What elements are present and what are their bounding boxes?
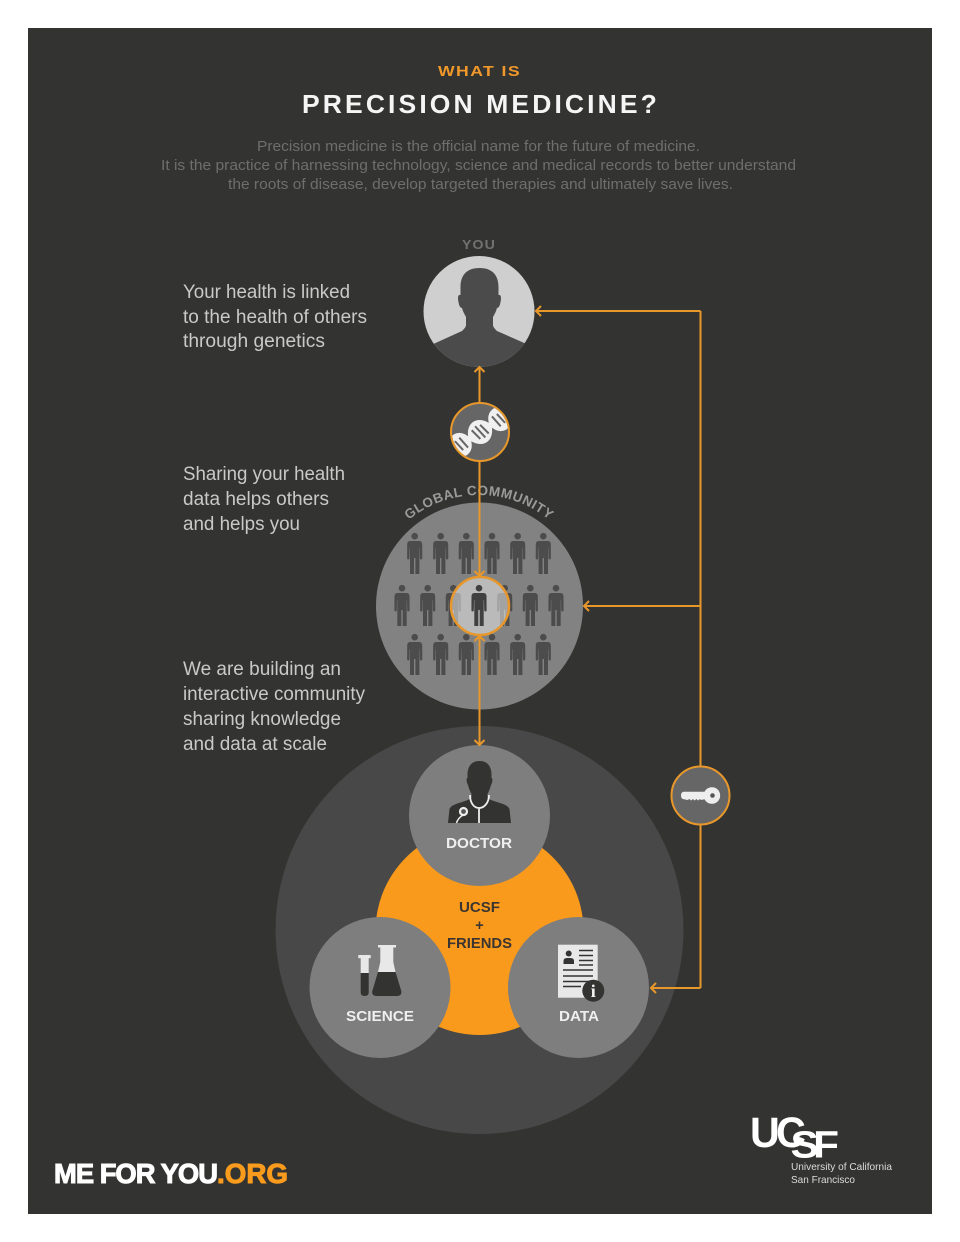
node: data [508, 917, 649, 1058]
intro paragraph: It is the practice of harnessing technology, science and medical records to better understand [161, 157, 796, 174]
node: doctor: DOCTOR [446, 836, 513, 852]
logo: ucsf: SF [790, 1124, 838, 1166]
logo: ucsf: UC [750, 1109, 805, 1157]
connector lines [474, 306, 700, 993]
centre label: + [475, 918, 484, 934]
large ecosystem circle [276, 726, 684, 1134]
node: science: SCIENCE [346, 1009, 414, 1025]
text: sharing data: data helps others [183, 489, 329, 510]
node: data: DATA [559, 1009, 600, 1025]
eyebrow heading: WHAT IS [438, 63, 521, 80]
intro paragraph: the roots of disease, develop targeted therapies and ultimately save lives. [228, 176, 733, 193]
icon: doctor [448, 761, 511, 823]
text: interactive community: We are building an [183, 659, 341, 680]
node: doctor [409, 745, 550, 886]
icon: key [672, 766, 730, 824]
curved label: GLOBAL COMMUNITY [405, 486, 554, 518]
logo: ucsf: University of California [791, 1161, 892, 1173]
logo: ucsf: San Francisco [791, 1174, 855, 1186]
text: sharing data [183, 464, 345, 535]
logo: me for you: ME FOR YOU [54, 1158, 217, 1189]
centre label [447, 900, 512, 952]
icon: record sheet: i [591, 981, 596, 1001]
text: interactive community [183, 659, 365, 755]
crowd of people [394, 533, 564, 675]
text: interactive community: interactive community [183, 684, 365, 705]
you highlight in community [446, 577, 512, 635]
community circle [376, 486, 583, 710]
text: health linked [183, 282, 367, 352]
centre label: FRIENDS [447, 936, 512, 952]
icon: dna [450, 402, 510, 462]
node: science [310, 917, 450, 1058]
centre label: UCSF [459, 900, 500, 916]
icon: record sheet [558, 945, 604, 1002]
text: sharing data: and helps you [183, 514, 300, 535]
text: sharing data: Sharing your health [183, 464, 345, 485]
icon: test tube and flask [358, 945, 401, 996]
logo: ucsf [750, 1109, 892, 1186]
intro paragraph: Precision medicine is the official name for the future of medicine. [257, 138, 700, 155]
orange UCSF circle [376, 827, 584, 1035]
text: interactive community: sharing knowledge [183, 709, 341, 730]
node: you: YOU [462, 238, 496, 252]
text: health linked: through genetics [183, 331, 325, 352]
logo: me for you [54, 1158, 288, 1189]
icon: person silhouette [434, 268, 524, 367]
node: you [424, 238, 534, 370]
text: interactive community: and data at scale [183, 734, 327, 755]
text: health linked: Your health is linked [183, 282, 350, 303]
title: PRECISION MEDICINE? [302, 91, 660, 119]
text: health linked: to the health of others [183, 307, 367, 328]
intro paragraph [161, 138, 796, 193]
logo: me for you: .ORG [217, 1158, 288, 1189]
